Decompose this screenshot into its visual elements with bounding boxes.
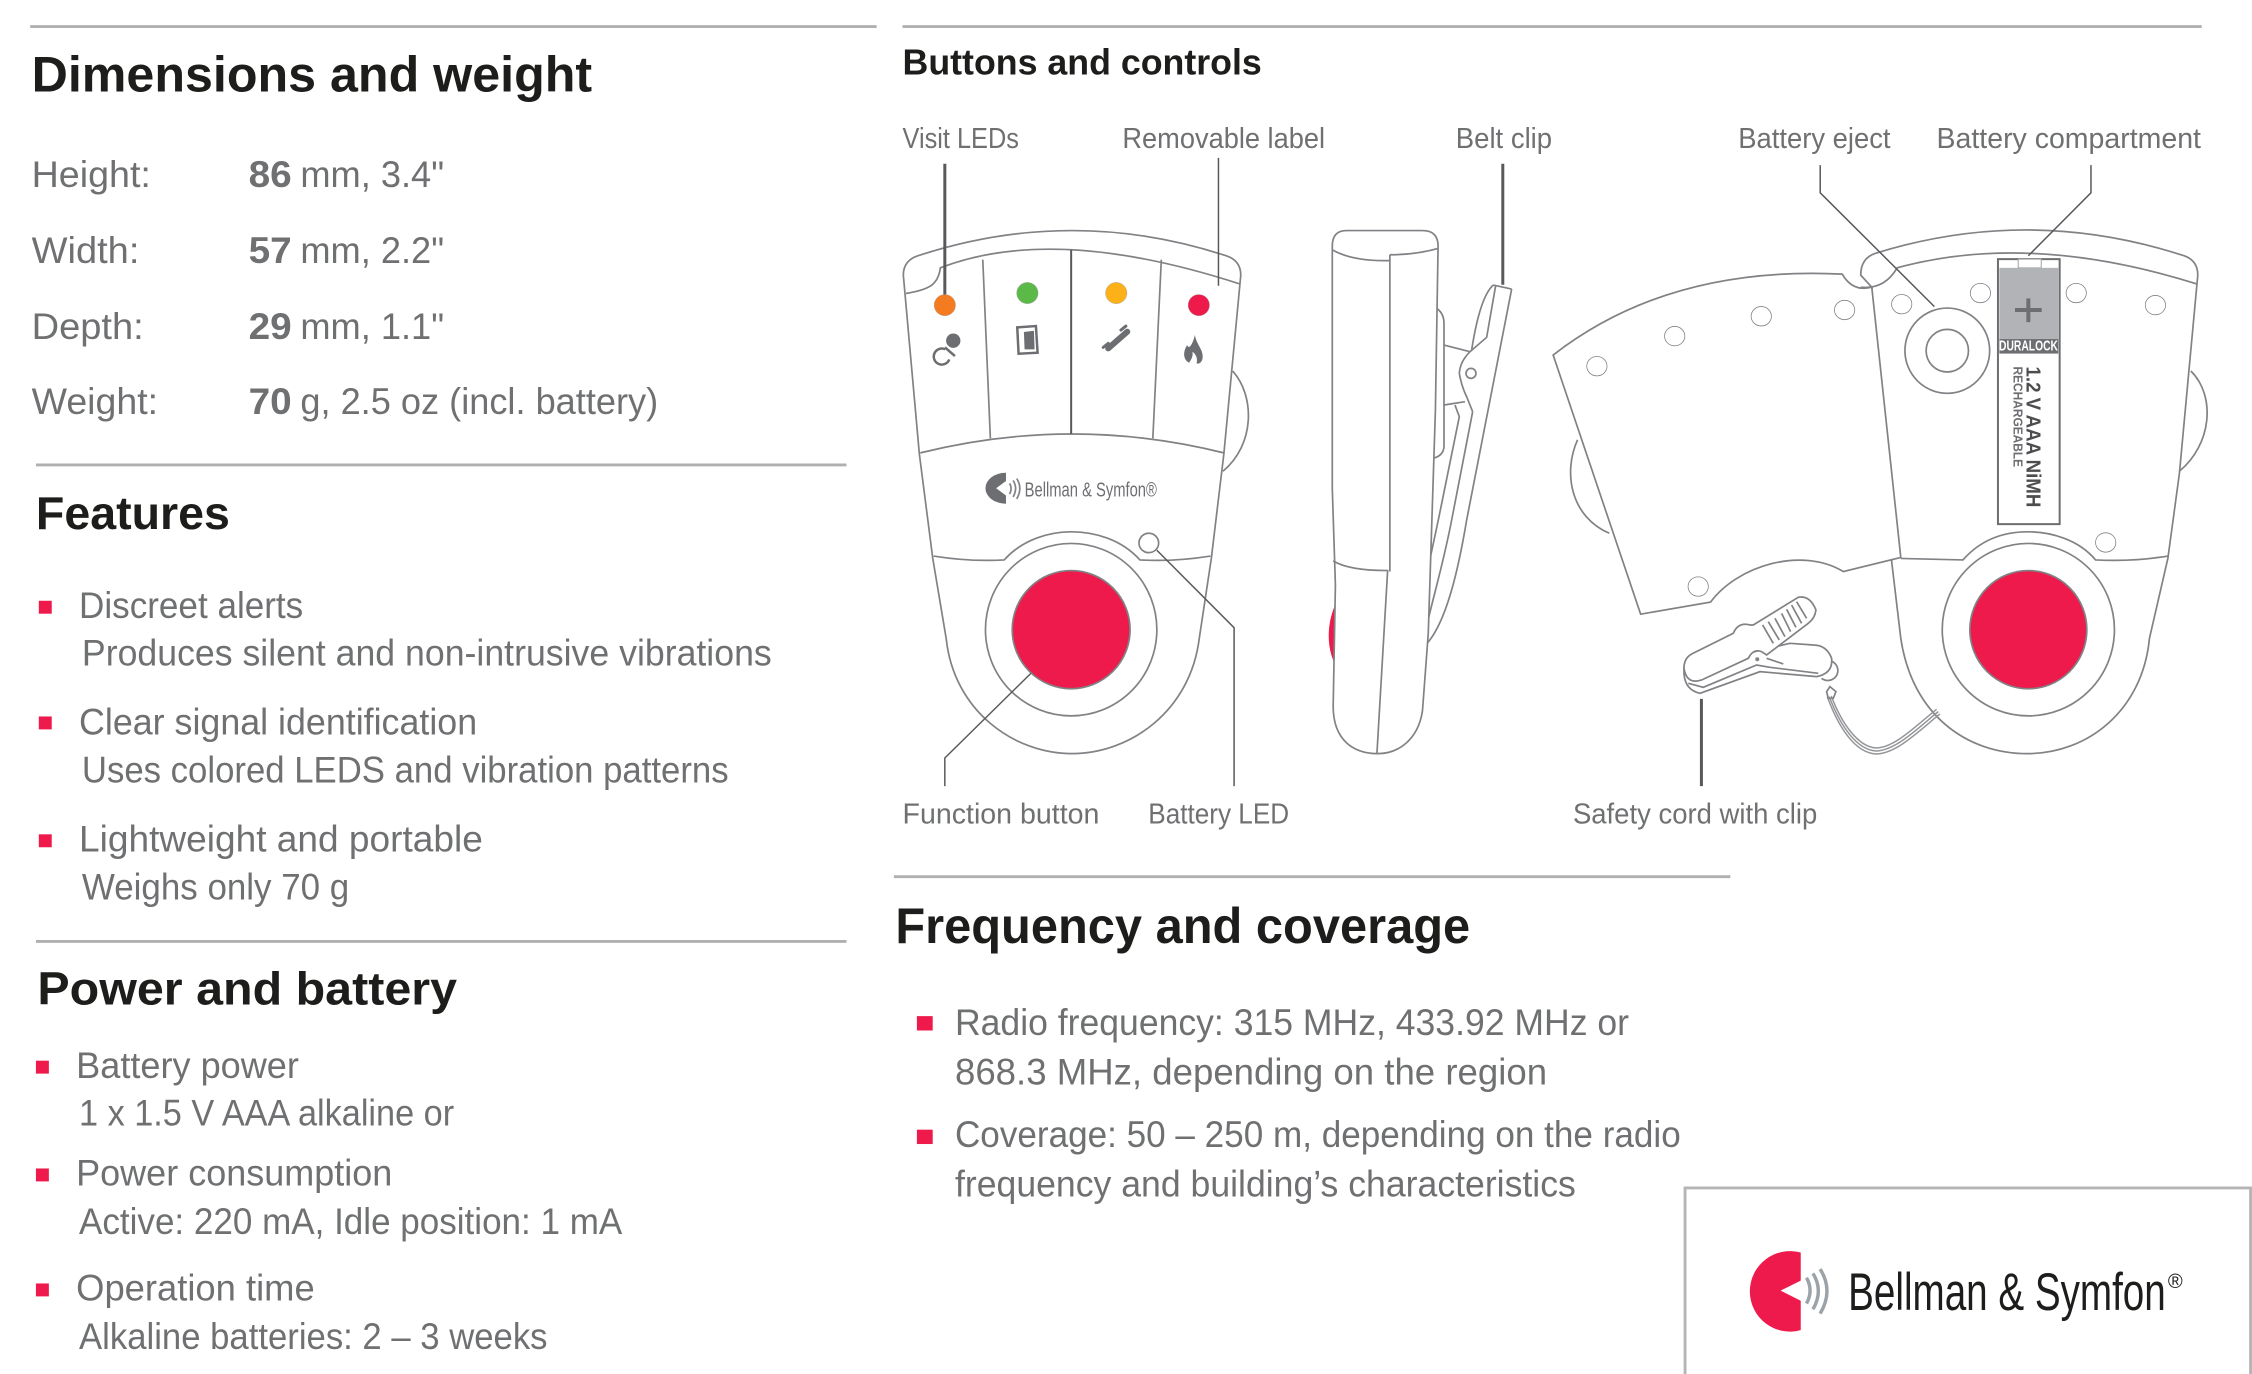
visit LEDs xyxy=(934,282,1210,316)
heading: dimensions and weight: Dimensions and weight xyxy=(32,45,592,102)
icon: flame xyxy=(1184,335,1203,364)
row: height: mm, 3.4" xyxy=(300,153,444,195)
battery eject button xyxy=(1905,308,1990,393)
row: height: 86 xyxy=(249,153,292,195)
row: weight: Weight: xyxy=(32,380,158,422)
label: battery compartment: Battery compartment xyxy=(1937,123,2201,155)
item: power consumption: Power consumption xyxy=(76,1152,392,1194)
battery text: RECHARGEABLE xyxy=(2010,366,2025,467)
panel: buttons and controls xyxy=(903,42,2207,831)
label: function button: Function button xyxy=(903,799,1099,831)
row: depth: mm, 1.1" xyxy=(300,305,444,347)
item: operation time: Alkaline batteries: 2 – 3 weeks xyxy=(79,1315,548,1357)
feature: lightweight and portable: Weighs only 70 g xyxy=(82,866,349,908)
row: depth xyxy=(32,305,444,347)
row: width: 57 xyxy=(249,229,292,271)
row: width: Width: xyxy=(32,229,139,271)
device side body xyxy=(1329,164,1503,754)
item: battery power xyxy=(36,1044,454,1133)
row: height xyxy=(32,153,444,195)
contact holes xyxy=(1587,283,2166,596)
label: battery eject: Battery eject xyxy=(1738,123,1891,155)
illustration: device front view xyxy=(903,158,1248,786)
heading: buttons and controls: Buttons and controls xyxy=(903,42,1262,83)
label: belt clip: Belt clip xyxy=(1456,123,1552,155)
battery LED xyxy=(1139,533,1159,553)
leader lines: back view xyxy=(1701,165,2091,786)
label: safety cord with clip: Safety cord with clip xyxy=(1573,799,1817,831)
item: power consumption: Active: 220 mA, Idle position: 1 mA xyxy=(79,1200,622,1242)
battery text xyxy=(1999,338,2058,507)
feature: discreet alerts: Produces silent and non-intrusive vibrations xyxy=(82,631,772,673)
battery text: 1.2 V AAA NiMH xyxy=(2021,366,2043,507)
registered mark: ® xyxy=(2168,1271,2183,1293)
item: coverage: frequency and building’s characteristics xyxy=(955,1162,1576,1205)
row: weight: 70 xyxy=(249,380,292,422)
row: depth: 29 xyxy=(249,305,292,347)
icons: alert symbols xyxy=(934,326,1203,365)
row: weight xyxy=(32,380,658,422)
logo mark xyxy=(1750,1251,1827,1332)
item: radio frequency: 868.3 MHz, depending on the region xyxy=(955,1050,1547,1092)
row: depth: Depth: xyxy=(32,305,144,347)
leader lines: front view xyxy=(945,158,1234,786)
item: battery power: Battery power xyxy=(76,1044,299,1086)
heading: power and battery: Power and battery xyxy=(37,963,457,1015)
item: coverage xyxy=(917,1113,1681,1205)
label: removable label: Removable label xyxy=(1122,123,1325,155)
icon: door xyxy=(1017,326,1038,354)
panel: power and battery xyxy=(36,963,622,1357)
function button xyxy=(985,543,1157,716)
logo mark: small xyxy=(985,473,1020,504)
panel: features xyxy=(36,487,772,908)
battery text: DURALOCK xyxy=(1999,338,2058,355)
row: width: mm, 2.2" xyxy=(300,229,444,271)
feature: lightweight and portable xyxy=(39,818,483,908)
feature: discreet alerts: Discreet alerts xyxy=(79,584,303,626)
heading: frequency and coverage: Frequency and coverage xyxy=(895,897,1470,954)
feature: clear signal identification xyxy=(39,700,729,791)
item: radio frequency xyxy=(917,1001,1629,1092)
item: power consumption xyxy=(36,1152,622,1242)
feature: clear signal identification: Clear signal identification xyxy=(79,700,477,742)
item: operation time xyxy=(36,1267,548,1357)
label: battery LED: Battery LED xyxy=(1148,799,1289,831)
function button: back view xyxy=(1942,543,2114,716)
item: battery power: 1 x 1.5 V AAA alkaline or xyxy=(79,1091,454,1133)
wordmark: small: Bellman & Symfon® xyxy=(1025,480,1157,502)
row: height: Height: xyxy=(32,153,151,195)
open cover xyxy=(1553,273,1901,614)
item: radio frequency: Radio frequency: 315 MHz, 433.92 MHz or xyxy=(955,1001,1629,1043)
logo box xyxy=(1685,1188,2251,1374)
feature: discreet alerts xyxy=(39,584,772,673)
row: width xyxy=(32,229,444,271)
label: visit LEDs: Visit LEDs xyxy=(903,123,1019,155)
item: operation time: Operation time xyxy=(76,1267,315,1309)
heading: features: Features xyxy=(36,487,230,539)
feature: lightweight and portable: Lightweight and portable xyxy=(79,818,483,860)
panel: dimensions and weight xyxy=(32,45,658,422)
panel: frequency and coverage xyxy=(895,897,1681,1205)
illustration: device side view with belt clip xyxy=(1329,164,1512,754)
item: coverage: Coverage: 50 – 250 m, depending on the radio xyxy=(955,1113,1681,1155)
safety clip and cord xyxy=(1684,597,1940,754)
illustration: device back view with open cover xyxy=(1553,165,2207,786)
belt clip xyxy=(1427,285,1512,642)
icon: pacifier xyxy=(934,334,960,365)
icon: telephone xyxy=(1103,326,1127,348)
battery xyxy=(1998,259,2060,524)
row: weight: g, 2.5 oz (incl. battery) xyxy=(300,380,658,422)
feature: clear signal identification: Uses colored LEDS and vibration patterns xyxy=(82,749,729,791)
